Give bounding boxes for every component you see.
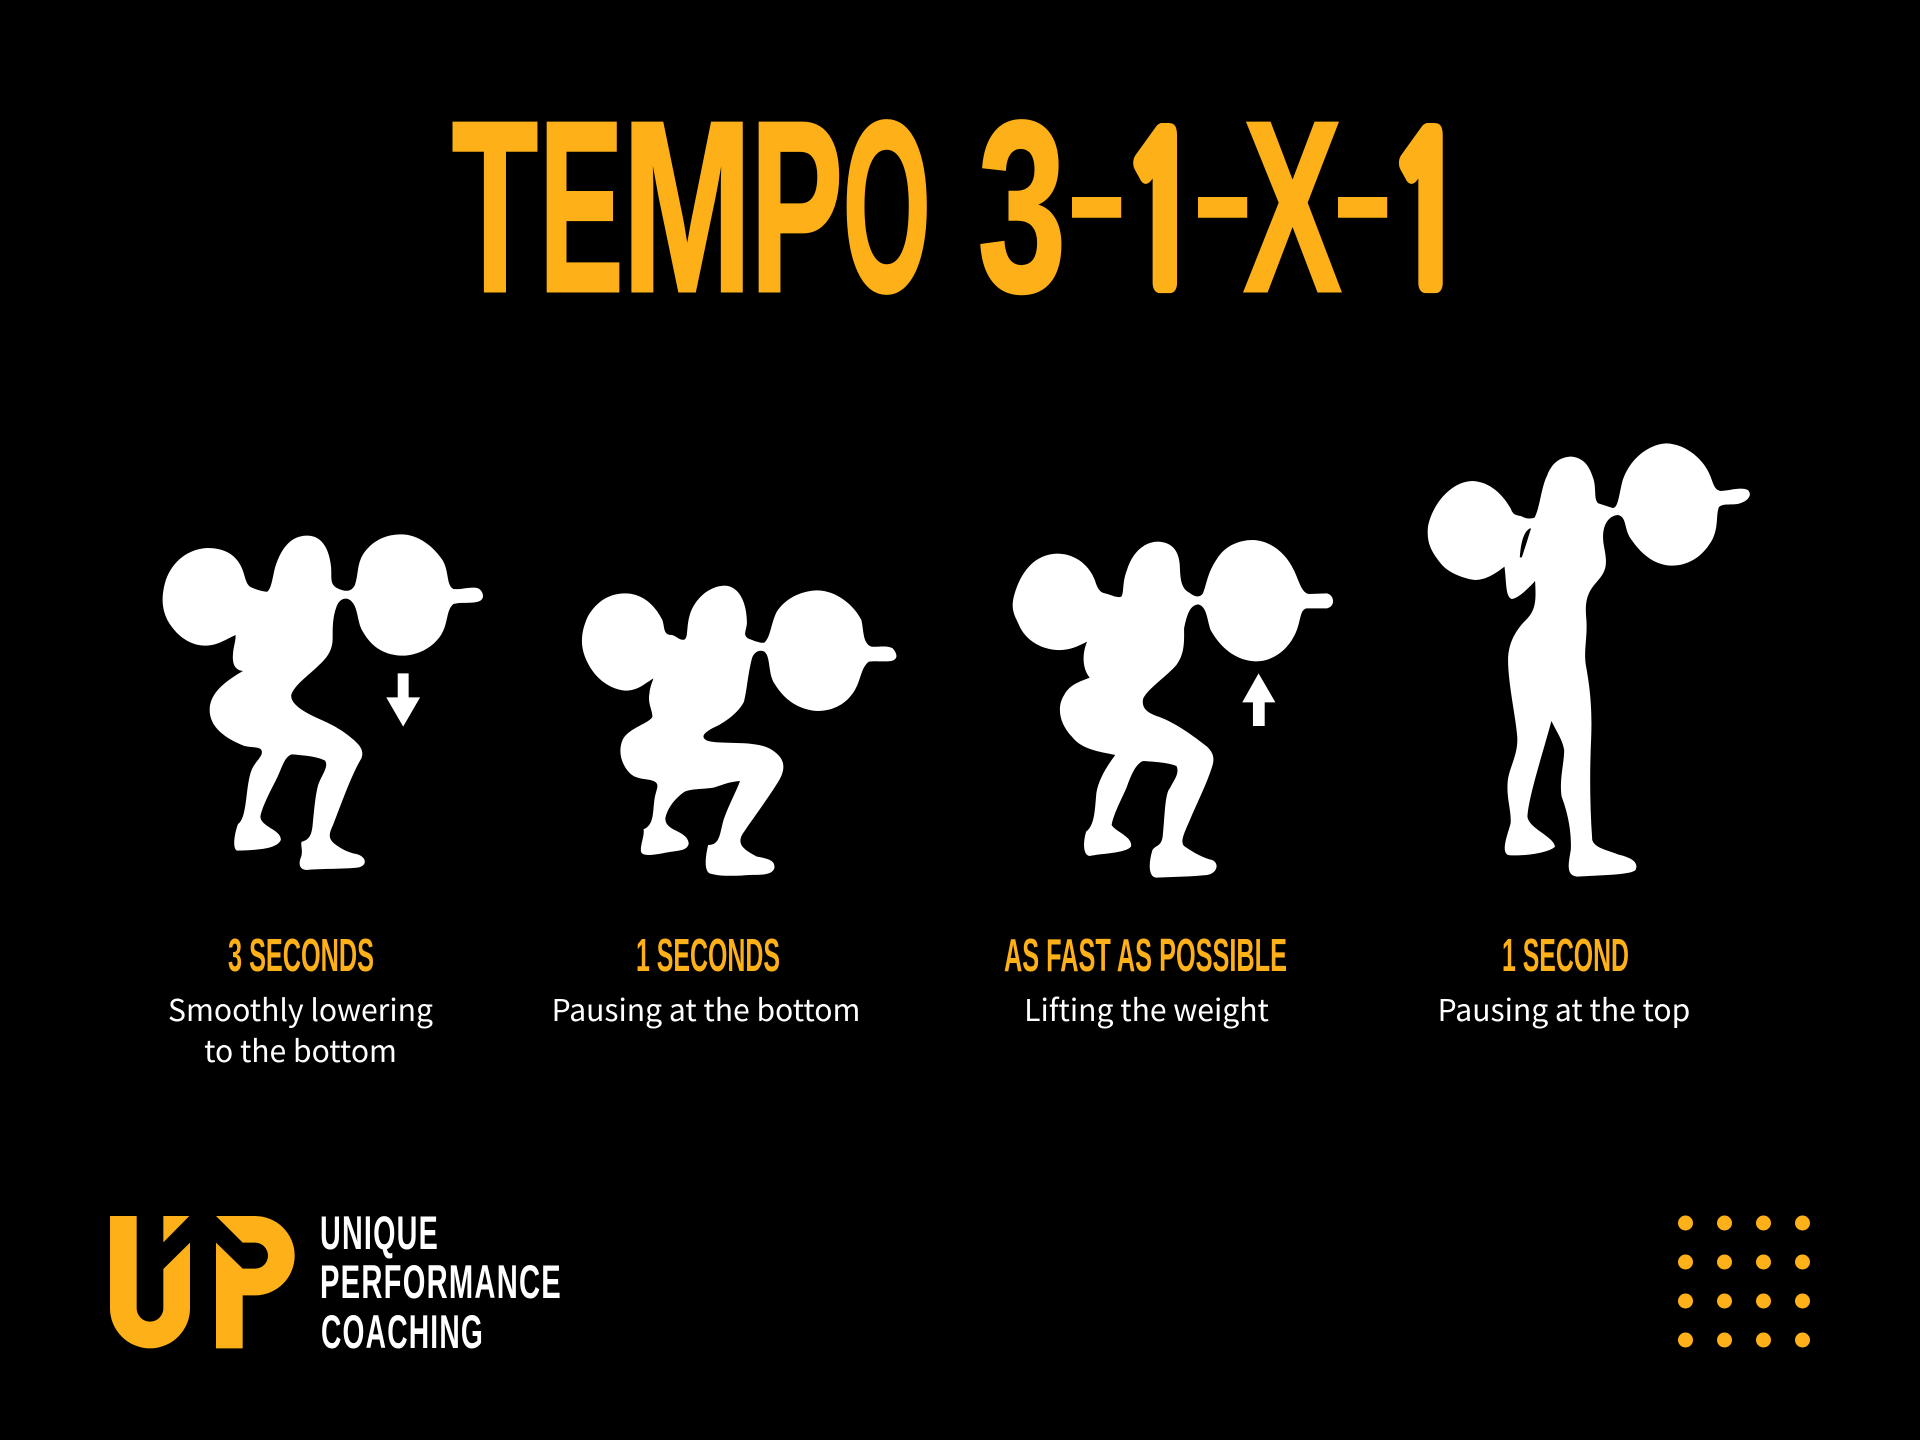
arrow: down bbox=[386, 673, 420, 727]
title: X bbox=[1243, 70, 1342, 343]
phase 2 heading: 1 SECONDS bbox=[636, 929, 780, 981]
phase 4 heading: 1 SECOND bbox=[1502, 929, 1629, 981]
figure: lowering squat bbox=[163, 534, 483, 870]
logo wordmark bbox=[320, 1206, 562, 1358]
figure: standing at top bbox=[1428, 443, 1750, 877]
phase 1 heading: 3 SECONDS bbox=[228, 929, 374, 981]
title: P bbox=[750, 70, 843, 343]
title: - bbox=[1333, 111, 1393, 278]
phase 1 description: Smoothly lowering bbox=[168, 986, 433, 1030]
title: 1 bbox=[1121, 114, 1203, 316]
title: O bbox=[843, 70, 931, 343]
title: - bbox=[1067, 111, 1127, 278]
logo mark: UP bbox=[110, 1216, 295, 1348]
phase 4 description: Pausing at the top bbox=[1438, 986, 1690, 1030]
phase 1 caption bbox=[168, 929, 433, 1071]
phase 2 description: Pausing at the bottom bbox=[552, 986, 860, 1030]
phase 4 caption bbox=[1438, 929, 1690, 1030]
title: E bbox=[539, 70, 624, 343]
phase 1 description: to the bottom bbox=[204, 1027, 397, 1071]
dot grid bbox=[1678, 1216, 1810, 1348]
arrow: up bbox=[1242, 673, 1275, 726]
figure: pause at bottom bbox=[582, 586, 896, 876]
title: - bbox=[1193, 111, 1253, 278]
phase 3 description: Lifting the weight bbox=[1024, 986, 1269, 1030]
phase 3 caption bbox=[1004, 929, 1287, 1030]
phase 2 caption bbox=[552, 929, 860, 1030]
logo wordmark: UNIQUE bbox=[320, 1206, 439, 1259]
title: 1 bbox=[1386, 114, 1468, 316]
figure: lifting squat bbox=[1013, 540, 1333, 878]
logo wordmark: PERFORMANCE bbox=[320, 1255, 562, 1308]
title: T bbox=[452, 70, 538, 343]
title: M bbox=[622, 70, 752, 343]
logo wordmark: COACHING bbox=[321, 1305, 484, 1358]
title bbox=[452, 70, 1468, 343]
phase 3 heading: AS FAST AS POSSIBLE bbox=[1004, 929, 1287, 981]
figures row bbox=[163, 443, 1750, 878]
title: 3 bbox=[978, 70, 1066, 343]
